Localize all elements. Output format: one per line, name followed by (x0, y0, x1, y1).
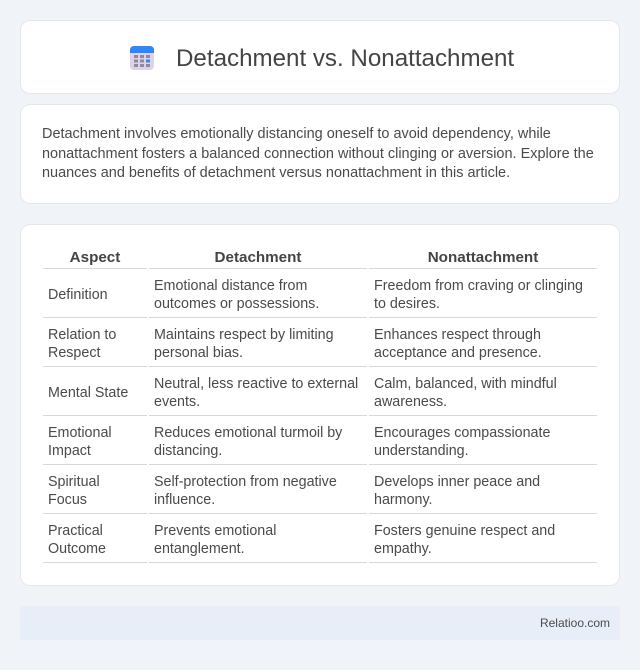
intro text (42, 126, 594, 181)
table: Detachment (215, 249, 301, 266)
row: relation to respect (48, 327, 542, 361)
intro text: nuances and benefits of detachment versus nonattachment in this article. (42, 165, 510, 181)
table: Practical (48, 523, 103, 539)
table: to desires. (374, 296, 440, 312)
table: empathy. (374, 541, 432, 557)
table: events. (154, 394, 200, 410)
table: personal bias. (154, 345, 243, 361)
table: Fosters genuine respect and (374, 523, 555, 539)
footer bar (20, 606, 620, 640)
table: Encourages compassionate (374, 425, 550, 441)
header card (20, 20, 620, 94)
column headings (70, 249, 538, 266)
table: harmony. (374, 492, 433, 508)
table: Outcome (48, 541, 106, 557)
table: Mental State (48, 385, 128, 401)
table: awareness. (374, 394, 447, 410)
table: Respect (48, 345, 100, 361)
footer text: Relatioo.com (540, 616, 610, 630)
title: Detachment vs. Nonattachment (176, 45, 514, 72)
table: Self-protection from negative (154, 474, 337, 490)
row: mental state (48, 376, 557, 410)
intro text: Detachment involves emotionally distancing oneself to avoid dependency, while (42, 126, 551, 142)
table: Maintains respect by limiting (154, 327, 334, 343)
table: acceptance and presence. (374, 345, 542, 361)
table: Develops inner peace and (374, 474, 540, 490)
table: Spiritual (48, 474, 100, 490)
table: Nonattachment (428, 249, 538, 266)
table: understanding. (374, 443, 469, 459)
table: Definition (48, 287, 108, 303)
table: Impact (48, 443, 91, 459)
table: Relation to (48, 327, 116, 343)
table: Enhances respect through (374, 327, 541, 343)
row: spiritual focus (48, 474, 540, 508)
table: Emotional (48, 425, 112, 441)
table: Freedom from craving or clinging (374, 278, 583, 294)
table: distancing. (154, 443, 222, 459)
table: Calm, balanced, with mindful (374, 376, 557, 392)
table: Neutral, less reactive to external (154, 376, 358, 392)
icon: calendar (130, 46, 154, 70)
intro text: nonattachment fosters a balanced connection without clinging or aversion. Explore the (42, 146, 594, 162)
table: Focus (48, 492, 87, 508)
row: practical outcome (48, 523, 555, 557)
table card (20, 224, 620, 586)
table: outcomes or possessions. (154, 296, 319, 312)
table: Aspect (70, 249, 120, 266)
row: emotional impact (48, 425, 550, 459)
intro card (20, 104, 620, 204)
table: entanglement. (154, 541, 245, 557)
table: Emotional distance from (154, 278, 307, 294)
table: Reduces emotional turmoil by (154, 425, 342, 441)
row: definition (48, 278, 583, 312)
table: Prevents emotional (154, 523, 276, 539)
table: influence. (154, 492, 215, 508)
